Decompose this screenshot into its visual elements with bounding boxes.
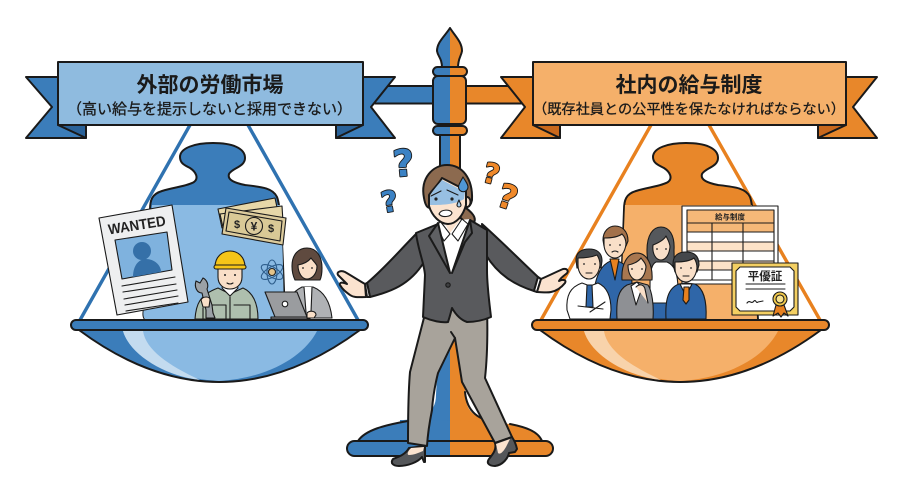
pillar top finial	[432, 28, 468, 135]
scale pillar	[400, 28, 505, 445]
employee: long black hair woman	[647, 227, 678, 319]
group of employees	[567, 226, 706, 319]
left arm and hand	[338, 233, 424, 297]
question marks: ?	[479, 156, 503, 192]
right banner heading: 社内の給与制度	[616, 74, 762, 97]
banner: external labor market	[26, 62, 395, 138]
sweat drops	[458, 177, 468, 192]
left weight	[143, 143, 284, 320]
office woman with laptop	[265, 248, 332, 319]
left shoe	[392, 446, 425, 466]
wanted poster	[99, 205, 188, 315]
right pan bowl	[540, 330, 821, 382]
pay system table document: 給与制度	[715, 212, 745, 222]
certificate: 平優証	[748, 269, 783, 283]
question marks: ?	[378, 183, 401, 220]
right hanging strings	[541, 125, 820, 320]
money bills: $	[268, 223, 274, 235]
certificate	[732, 263, 798, 317]
question marks: ?	[391, 141, 416, 186]
wanted poster: WANTED	[107, 214, 167, 238]
wrench	[195, 278, 215, 318]
ponytail	[456, 205, 475, 224]
head	[423, 165, 472, 224]
right banner subtitle: （既存社員との公平性を保たなければならない）	[533, 102, 845, 118]
right pan rim	[532, 320, 829, 330]
question marks: ?	[493, 176, 523, 219]
left pan assembly: external labor market	[71, 125, 368, 382]
left banner heading: 外部の労働市場	[136, 74, 284, 97]
right arm and hand	[482, 224, 568, 292]
money bills: ¥	[251, 220, 258, 234]
scale beam	[375, 86, 525, 104]
left hanging strings	[80, 125, 358, 320]
question marks	[378, 141, 523, 220]
money bills: $	[234, 219, 240, 231]
left banner subtitle: （高い給与を提示しないと採用できない）	[67, 101, 352, 118]
employee: back man brown hair	[595, 226, 632, 319]
employee: white shirt man arms crossed	[567, 249, 611, 319]
money bills	[218, 198, 286, 245]
blouse and collar	[437, 219, 470, 273]
right banner panel	[533, 62, 846, 125]
worker with helmet	[195, 251, 258, 319]
scale base	[346, 420, 554, 456]
right banner tails	[501, 77, 560, 138]
right shoe	[488, 437, 517, 466]
worried woman	[338, 165, 568, 466]
employee: navy suit man	[666, 252, 706, 319]
right weight	[620, 143, 758, 320]
left banner panel	[58, 62, 363, 125]
pan front rim	[71, 320, 368, 330]
left banner tails	[26, 77, 86, 138]
atom network icon	[259, 260, 285, 284]
right pan assembly: internal pay system	[532, 125, 829, 382]
left pan bowl	[79, 330, 360, 382]
banner: internal pay system	[501, 62, 877, 138]
employee: grey suit thinking woman	[617, 253, 653, 319]
pay system table document	[682, 206, 778, 284]
jacket torso	[416, 219, 491, 322]
trousers	[408, 306, 512, 446]
